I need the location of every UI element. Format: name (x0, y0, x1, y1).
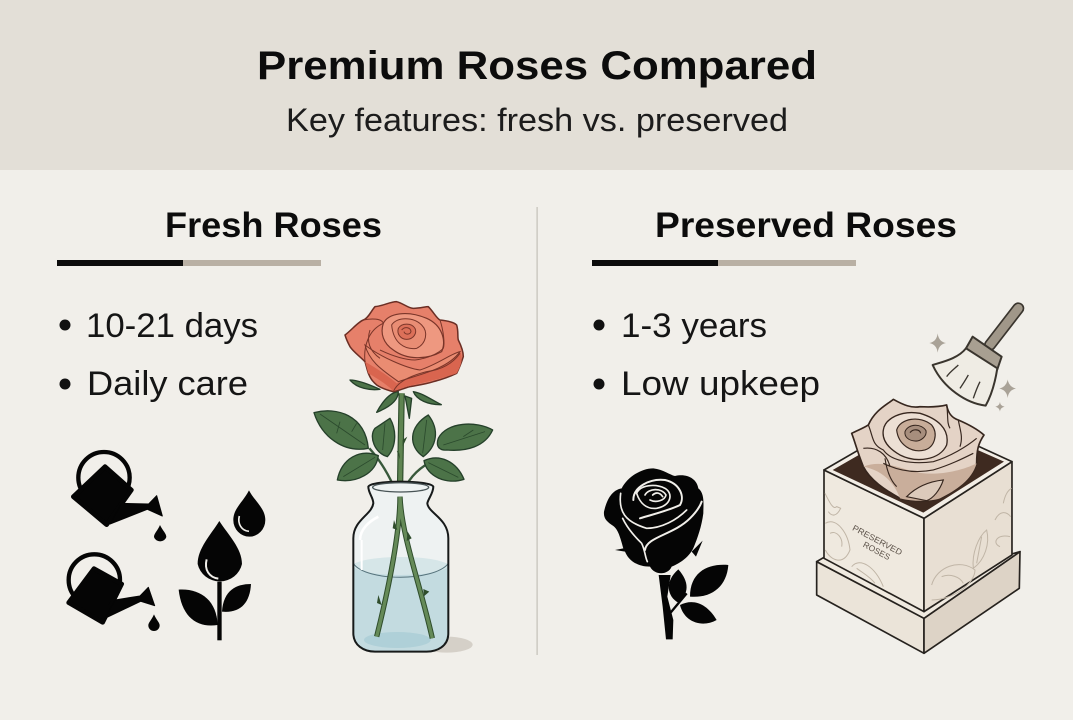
icon: black rose silhouette (604, 468, 728, 639)
water (354, 558, 448, 651)
heading underline (57, 260, 321, 266)
illustration: preserved rose gift box (817, 399, 1020, 653)
heading underline (592, 260, 856, 266)
beige rose bloom (852, 399, 984, 501)
vase outline (353, 482, 448, 652)
box label: PRESERVED (851, 523, 904, 557)
box base (817, 562, 924, 653)
icon: watering cans and plant (69, 452, 265, 640)
heading: preserved roses: Preserved Roses (655, 206, 957, 245)
bullet: care: Daily care (87, 365, 248, 403)
panel: fresh roses (57, 206, 493, 653)
bullet: upkeep: Low upkeep (621, 365, 820, 403)
header band (0, 0, 1073, 170)
box floral line art (825, 488, 1012, 600)
leaf branches (369, 448, 435, 490)
heading: fresh roses: Fresh Roses (165, 206, 382, 245)
icon: broom with sparkles (929, 308, 1018, 412)
box body (824, 470, 924, 612)
bullet: lifespan: 1-3 years (621, 307, 767, 345)
panel: preserved roses (592, 206, 1020, 653)
icon: lower watering can (69, 554, 160, 631)
icon: upper watering can (73, 452, 166, 541)
box label: ROSES (861, 539, 892, 562)
subtitle: Key features: fresh vs. preserved (286, 102, 788, 138)
leaves (314, 380, 493, 481)
vase shadow (421, 637, 473, 653)
stem above vase (400, 393, 402, 490)
rose bloom (345, 302, 463, 392)
bullet: lifespan: 10-21 days (86, 307, 258, 345)
illustration: red rose in glass vase (314, 302, 493, 653)
title: Premium Roses Compared (257, 44, 817, 88)
icon: plant with water drop (179, 490, 265, 640)
stems in vase (377, 497, 432, 638)
glass vase (353, 482, 448, 652)
